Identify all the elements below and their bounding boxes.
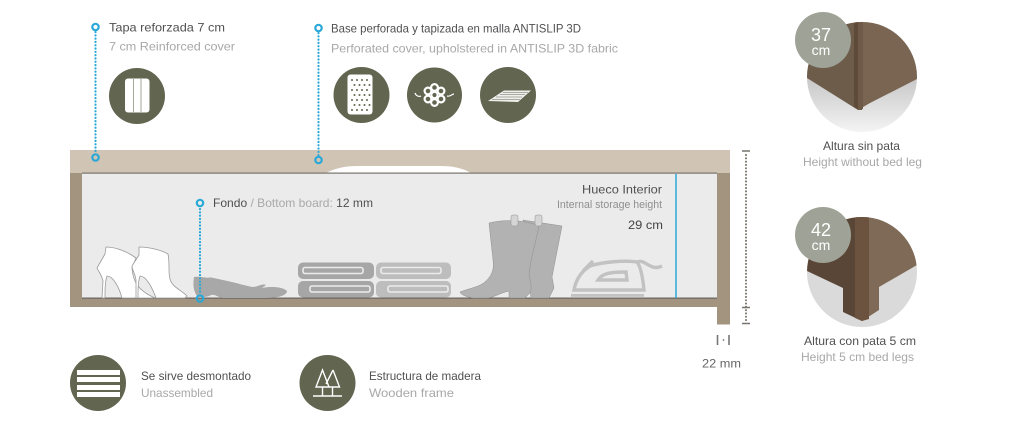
subheading: 7 cm Reinforced cover xyxy=(109,40,235,54)
icon: folded towels xyxy=(298,262,451,298)
interior top line xyxy=(82,172,717,174)
height badge: 37 xyxy=(811,25,831,45)
heading: Se sirve desmontado xyxy=(141,369,251,383)
icon: clothes iron xyxy=(571,261,662,297)
height badge: cm xyxy=(812,42,830,58)
callout: bottom board xyxy=(197,196,373,302)
icon: trees xyxy=(300,355,356,411)
value: 29 cm xyxy=(628,218,663,232)
heading: Estructura de madera xyxy=(369,369,481,383)
interior storage space xyxy=(82,173,717,298)
photo: wooden corner without leg xyxy=(807,22,917,132)
left post xyxy=(70,172,82,307)
heading: Altura con pata 5 cm xyxy=(804,334,916,348)
subheading: Perforated cover, upholstered in ANTISLIP 3D fabric xyxy=(331,42,618,56)
feature: unassembled xyxy=(70,355,251,411)
right post xyxy=(717,172,730,324)
icon: flat shoe xyxy=(193,276,287,298)
callout: internal storage height xyxy=(557,174,676,298)
thickness marker xyxy=(718,335,729,345)
icon: tall boots xyxy=(460,215,562,298)
marker dot xyxy=(723,339,724,341)
photo: wooden corner with leg xyxy=(807,217,917,327)
leader line xyxy=(199,209,201,294)
panel: height with leg xyxy=(795,207,925,364)
heading: Tapa reforzada 7 cm xyxy=(109,20,225,34)
height badge: cm xyxy=(812,237,830,253)
subheading: Height without bed leg xyxy=(803,155,922,169)
callout: reinforced cover xyxy=(92,20,235,161)
icon: stacked boards xyxy=(70,355,126,411)
subheading: Height 5 cm bed legs xyxy=(801,350,914,364)
heading: Hueco Interior xyxy=(582,182,662,196)
second stack xyxy=(376,262,451,298)
subheading: Internal storage height xyxy=(557,199,662,211)
value: 22 mm xyxy=(702,356,741,370)
bed cross-section diagram xyxy=(70,150,730,324)
label: Fondo / Bottom board: 12 mm xyxy=(213,196,373,210)
icon: perforated panel xyxy=(334,67,390,123)
icon: 3D mesh layers xyxy=(480,67,536,123)
panel: height without leg xyxy=(795,12,925,169)
feature: wooden frame xyxy=(300,355,481,411)
white cover notch xyxy=(326,166,471,173)
heading: Altura sin pata xyxy=(823,139,900,153)
height badge xyxy=(795,207,851,263)
bottom marker xyxy=(315,157,322,163)
board thickness dimension xyxy=(702,335,741,370)
subheading: Wooden frame xyxy=(369,386,454,400)
bottom marker xyxy=(197,295,203,302)
bottom marker xyxy=(92,154,99,161)
icon: reinforced cover xyxy=(109,68,165,124)
callout: perforated base xyxy=(315,22,618,163)
total height dimension line xyxy=(742,151,750,324)
top marker xyxy=(92,24,99,30)
leader line xyxy=(94,32,97,154)
leader line xyxy=(317,33,320,156)
bottom board xyxy=(70,298,730,307)
icon: white ankle boots xyxy=(97,247,187,298)
top marker xyxy=(197,200,203,206)
height arrow xyxy=(675,174,677,298)
subheading: Unassembled xyxy=(141,386,213,400)
top marker xyxy=(315,25,322,31)
heading: Base perforada y tapizada en malla ANTISLIP 3D xyxy=(331,22,581,36)
first stack xyxy=(298,262,374,298)
icon: breathable fabric flower xyxy=(407,68,462,122)
height badge: 42 xyxy=(811,220,831,240)
reinforced cover xyxy=(70,150,730,173)
interior bottom line xyxy=(82,298,717,299)
height badge xyxy=(795,12,851,68)
